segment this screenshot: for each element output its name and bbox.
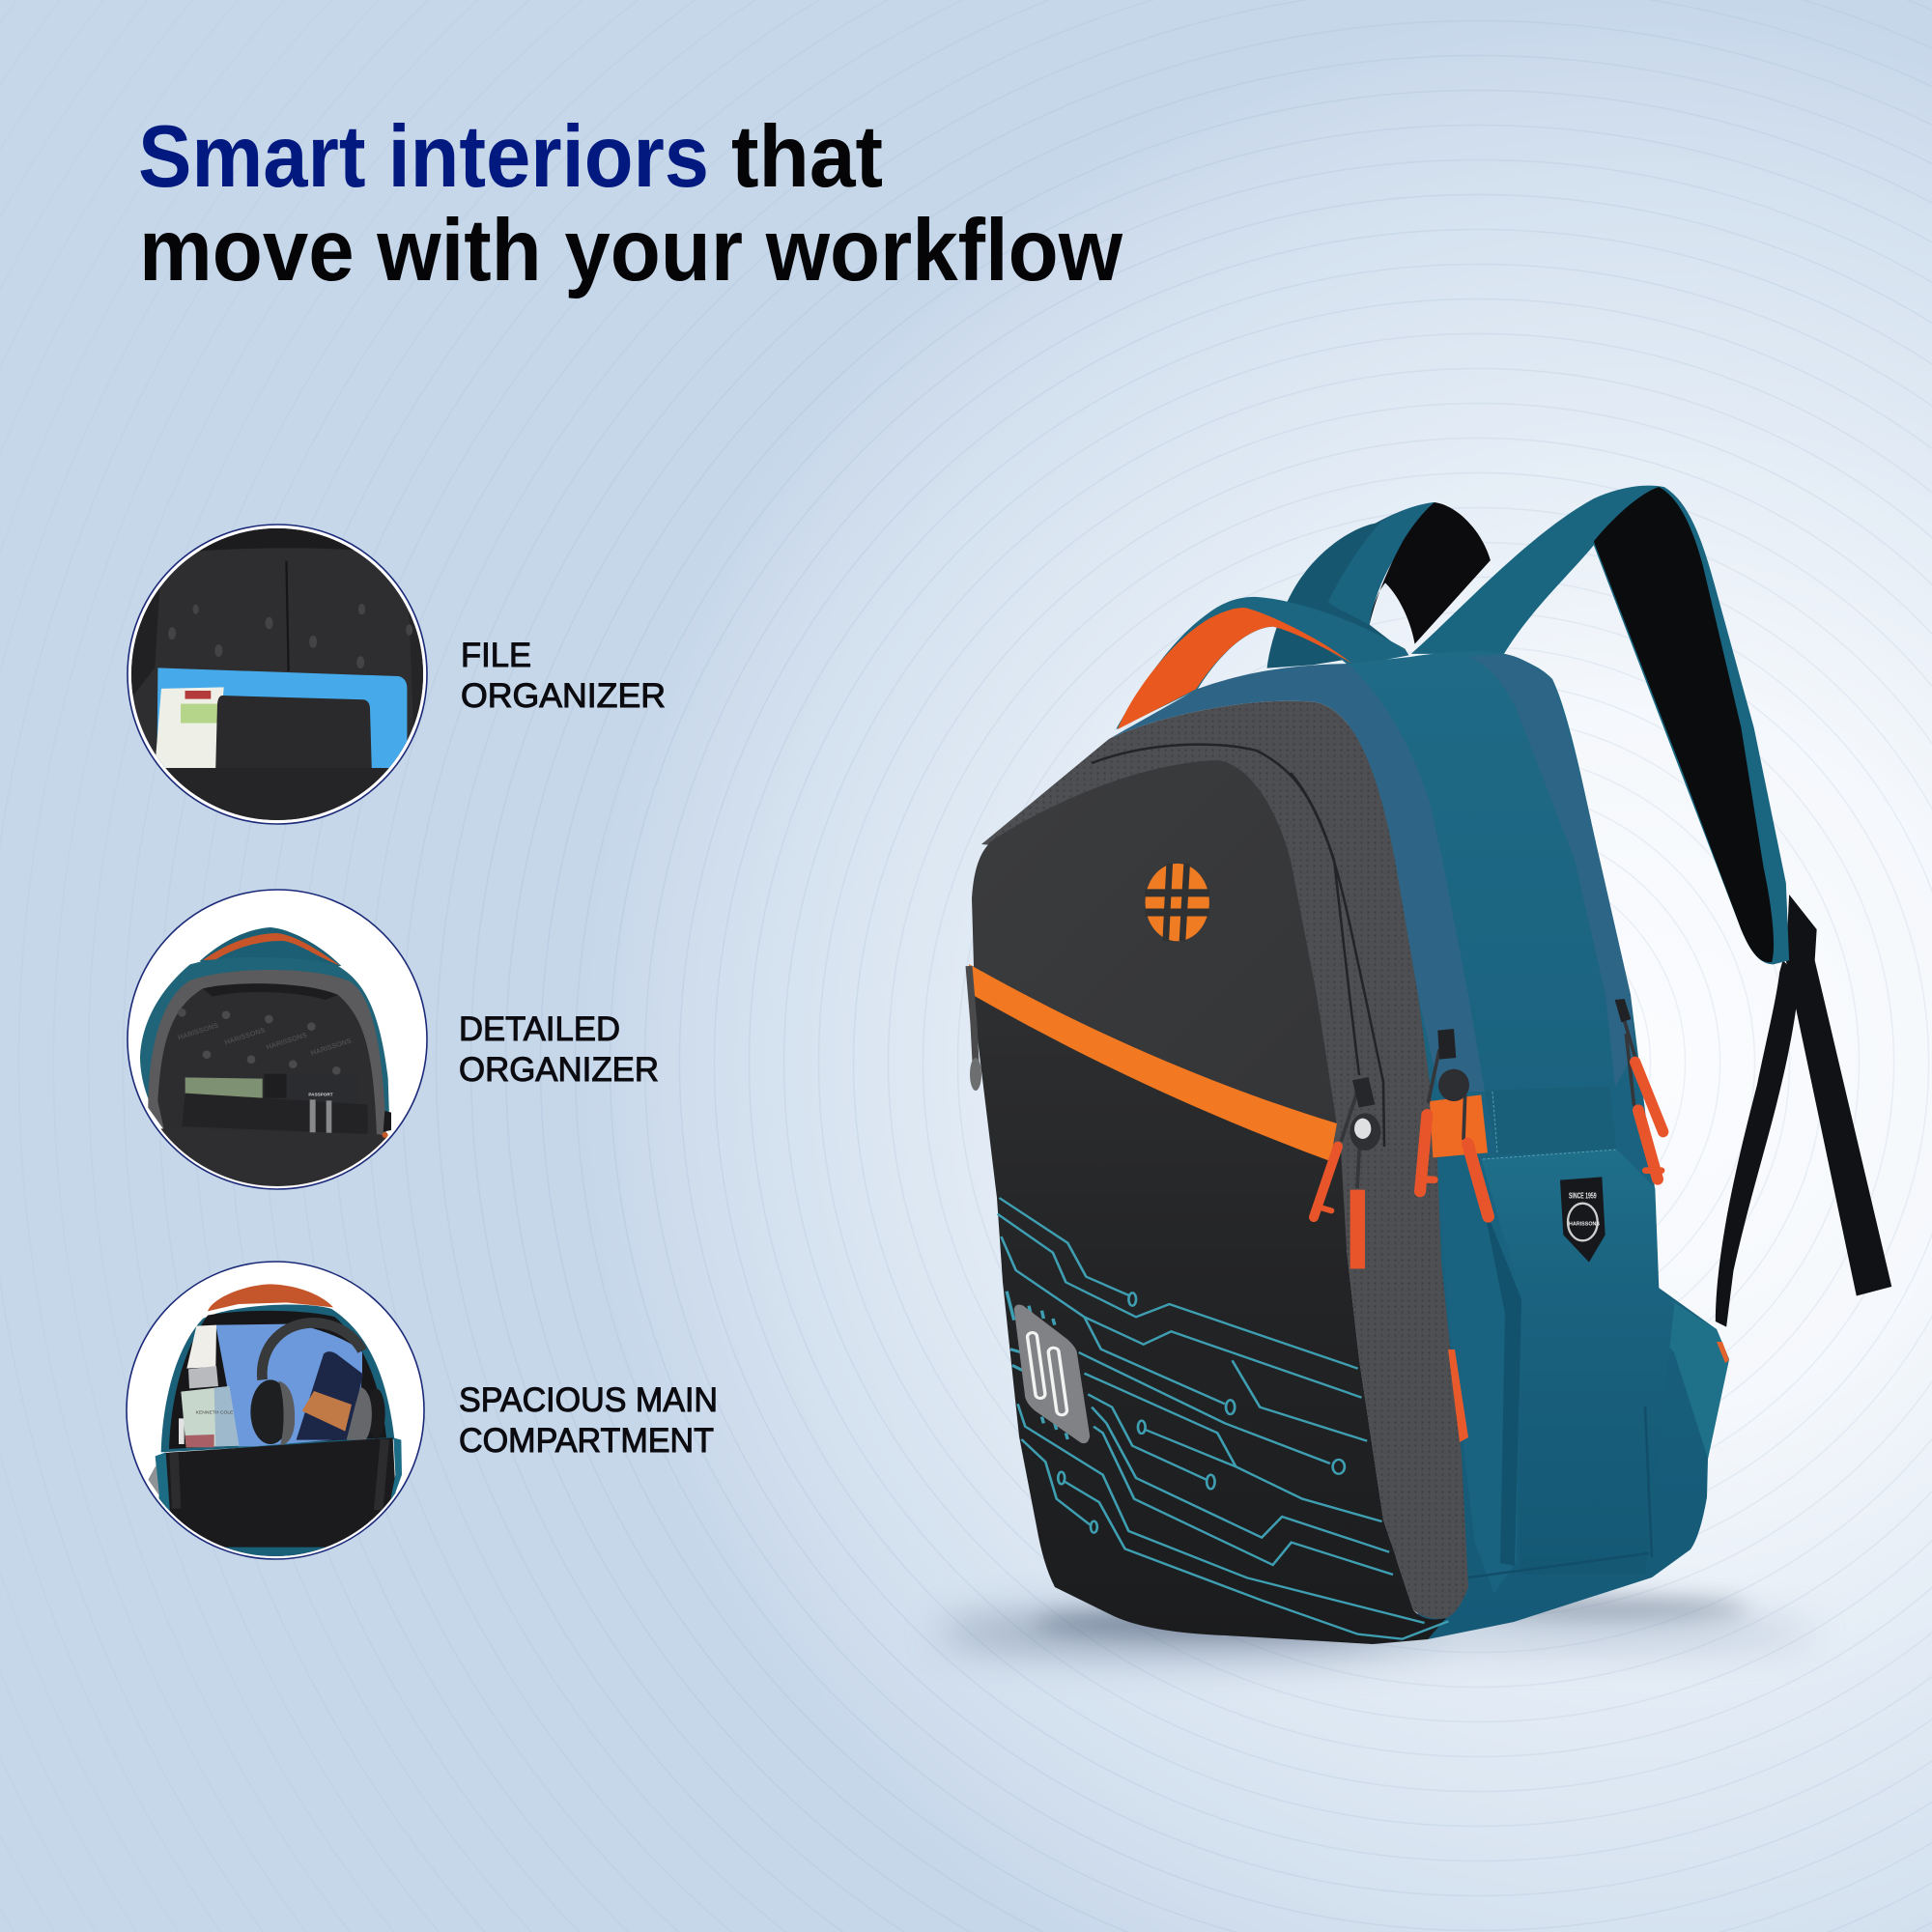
circuit pattern [998,1198,1448,1639]
panel: detailed organizer photo circle: HARISSONS [223,1026,266,1047]
label: spacious main compartment: COMPARTMENT [459,1422,714,1460]
brand badge: SINCE 1959 [1569,1191,1597,1201]
orange front zipper [969,964,1337,1161]
panel: detailed organizer photo circle: PASSPORT [308,1092,333,1096]
front upper panel [971,760,1337,1135]
top handle [1116,597,1408,729]
pocket fold shading [1483,1203,1521,1566]
zip pulls and tape [1314,999,1663,1268]
side pocket [1436,1087,1674,1594]
label: spacious main compartment [459,1381,718,1460]
label: spacious main compartment: SPACIOUS MAIN [459,1381,718,1419]
label: detailed organizer: DETAILED [459,1010,620,1048]
title: Smart interiors [138,108,709,206]
label: file organizer [461,637,666,715]
left zip pull [969,966,981,1091]
webbing straps and buckle [1716,895,1891,1327]
panel: detailed organizer photo circle: HARISSONS [310,1037,353,1058]
second zip band [1468,654,1634,1087]
label: file organizer: FILE [461,637,531,674]
back wing highlight [1654,1293,1729,1459]
far shoulder strap [1267,502,1491,668]
near shoulder strap [1411,486,1789,964]
panel: detailed organizer photo circle [128,890,427,1198]
panel: file organizer photo circle [127,524,428,825]
backpack [969,486,1891,1644]
red side tag [1448,1350,1468,1442]
label: file organizer: ORGANIZER [461,677,666,715]
brand badge [1560,1177,1605,1263]
brand badge: HARISSONS [1569,1221,1600,1227]
blue front collar [1109,664,1485,1092]
pocket bottom seam [1468,1406,1652,1577]
zipper seam lines [1092,745,1384,1147]
orange wing tab [1717,1342,1729,1363]
logo: orange hash circle [1146,864,1209,941]
label: detailed organizer: ORGANIZER [459,1051,659,1089]
panel: detailed organizer photo circle: HARISSONS [266,1031,308,1052]
label: detailed organizer [459,1010,659,1089]
chip patch [1014,1305,1090,1443]
teal side body [1348,651,1729,1639]
ground shadow [937,1597,1816,1658]
front lower panel [972,991,1446,1644]
title: move with your workflow [139,202,1122,299]
title: that [731,108,883,206]
title [138,108,1122,299]
panel: spacious main compartment photo circle: KENNETH COLE [196,1409,234,1415]
grey panel [981,701,1468,1619]
panel: spacious main compartment photo circle [127,1262,424,1565]
panel: detailed organizer photo circle: HARISSONS [177,1021,219,1042]
